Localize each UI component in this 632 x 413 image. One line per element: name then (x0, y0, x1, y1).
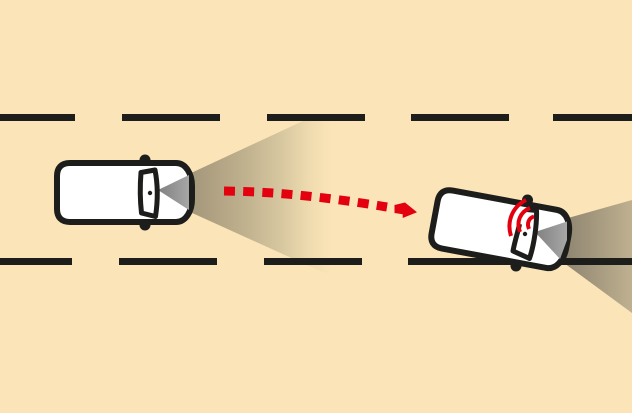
left car body (57, 163, 192, 222)
right car sensor dot (523, 232, 527, 236)
right car windshield (513, 210, 537, 258)
camera beam: right car (564, 200, 632, 313)
left car mirrors (140, 154, 150, 230)
red dashed trajectory arrow (224, 191, 417, 218)
left car windshield (140, 170, 157, 216)
left car sensor dot (148, 191, 152, 195)
right car sensor cone (535, 222, 567, 259)
right car (429, 188, 573, 272)
right car mirrors (510, 194, 533, 272)
left car (57, 154, 192, 230)
camera beam: left car (190, 121, 332, 275)
right car body (429, 188, 573, 271)
left car sensor cone (158, 175, 189, 210)
bottom lane markings (0, 258, 632, 265)
top lane markings (0, 114, 632, 121)
red warning signal arcs (509, 200, 534, 236)
